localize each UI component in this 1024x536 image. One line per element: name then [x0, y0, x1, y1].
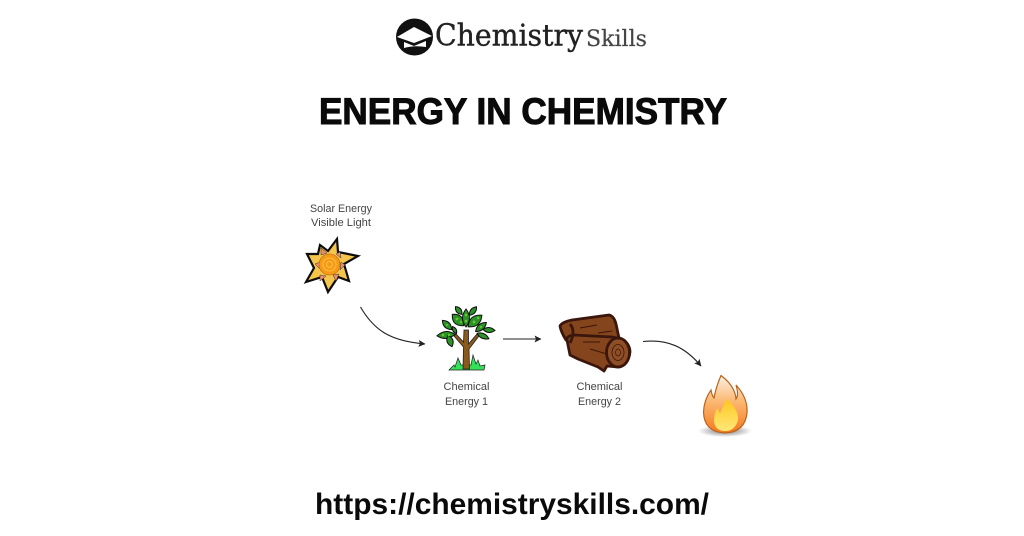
icon: logs	[560, 315, 630, 371]
label: solar energy	[310, 203, 372, 229]
leaves	[437, 305, 495, 348]
icon: graduation cap	[396, 18, 433, 56]
icon: fire	[698, 376, 752, 437]
arrow: logs to fire	[643, 341, 701, 366]
logo wordmark: Skills: Skills	[586, 27, 647, 52]
logo wordmark: Chemistry	[435, 18, 583, 54]
label: solar energy: Visible Light	[311, 217, 371, 229]
label: chemical energy 2: Energy 2	[578, 396, 621, 408]
label: chemical energy 1: Energy 1	[445, 396, 488, 408]
url: https://chemistryskills.com/	[315, 488, 709, 521]
label: solar energy: Solar Energy	[310, 203, 372, 215]
label: chemical energy 1	[444, 381, 490, 408]
trunk	[454, 330, 479, 369]
label: chemical energy 2	[576, 381, 622, 408]
arrow: tree to logs	[503, 338, 541, 340]
icon: tree	[437, 305, 495, 370]
title: ENERGY IN CHEMISTRY	[319, 91, 727, 132]
label: chemical energy 2: Chemical	[576, 381, 622, 393]
label: chemical energy 1: Chemical	[444, 381, 490, 393]
icon: sun	[306, 239, 358, 292]
grass	[449, 355, 485, 370]
leaf highlights	[442, 314, 482, 336]
arrow: sun to tree	[360, 307, 425, 344]
logo	[396, 18, 647, 56]
